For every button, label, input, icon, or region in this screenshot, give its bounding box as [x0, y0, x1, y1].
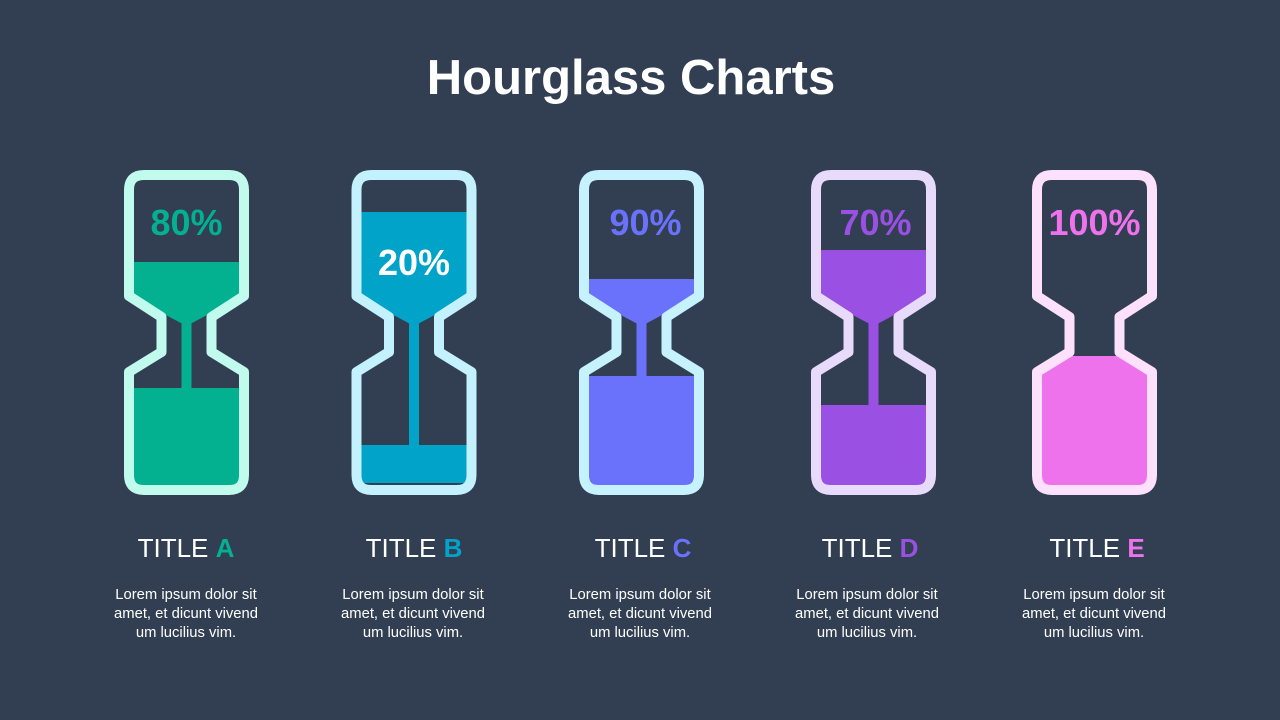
- hourglass E: 100%: [1048, 202, 1141, 243]
- descriptions: um lucilius vim.: [136, 625, 236, 641]
- titles: [138, 533, 1145, 563]
- descriptions: Lorem ipsum dolor sit: [569, 587, 711, 603]
- hourglass D: [814, 175, 934, 498]
- descriptions: amet, et dicunt vivend: [795, 606, 939, 622]
- titles: TITLE A: [138, 533, 235, 563]
- hourglass E: [1034, 175, 1154, 490]
- hourglass A: 80%: [150, 202, 223, 243]
- hourglass B: 20%: [378, 242, 450, 283]
- descriptions: Lorem ipsum dolor sit: [796, 587, 938, 603]
- descriptions: amet, et dicunt vivend: [1022, 606, 1166, 622]
- descriptions: um lucilius vim.: [590, 625, 690, 641]
- titles: TITLE C: [595, 533, 692, 563]
- descriptions: um lucilius vim.: [363, 625, 463, 641]
- hourglass B: [354, 175, 474, 490]
- title: Hourglass Charts: [427, 51, 835, 105]
- hourglass A: [126, 175, 246, 498]
- descriptions: amet, et dicunt vivend: [114, 606, 258, 622]
- descriptions: amet, et dicunt vivend: [341, 606, 485, 622]
- hourglass D: 70%: [839, 202, 912, 243]
- descriptions: um lucilius vim.: [1044, 625, 1144, 641]
- titles: TITLE B: [366, 533, 462, 563]
- descriptions: um lucilius vim.: [817, 625, 917, 641]
- descriptions: Lorem ipsum dolor sit: [115, 587, 257, 603]
- descriptions: Lorem ipsum dolor sit: [342, 587, 484, 603]
- descriptions: Lorem ipsum dolor sit: [1023, 587, 1165, 603]
- hourglass C: [582, 175, 702, 498]
- hourglass C: 90%: [609, 202, 682, 243]
- descriptions: [114, 587, 1166, 641]
- titles: TITLE D: [822, 533, 918, 563]
- titles: TITLE E: [1049, 533, 1145, 563]
- descriptions: amet, et dicunt vivend: [568, 606, 712, 622]
